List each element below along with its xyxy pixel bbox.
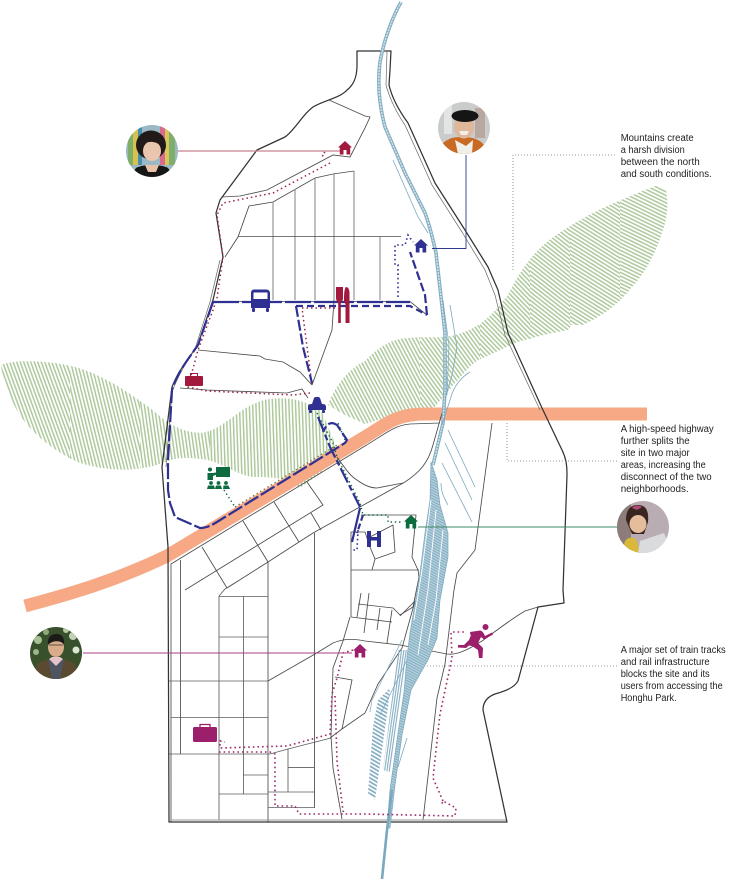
callout leader: rail <box>427 665 617 667</box>
portrait: woman <box>126 125 178 177</box>
portrait: man <box>30 627 82 679</box>
icon: runner <box>458 624 493 658</box>
route: red dotted <box>188 152 335 395</box>
street network <box>169 100 538 822</box>
route: green dotted <box>224 413 403 522</box>
text: mountains callout: Mountains create <box>621 133 694 144</box>
train tracks and rail infrastructure <box>368 2 475 879</box>
mountain band: right hatch <box>328 185 668 424</box>
text: mountains callout <box>621 133 712 180</box>
icon: fork and knife <box>336 287 350 323</box>
rail: west siding group <box>368 688 390 800</box>
icon: red briefcase <box>185 374 203 386</box>
site boundary <box>162 51 567 822</box>
icon: green house <box>404 515 418 528</box>
icon: purple briefcase <box>193 724 217 742</box>
text: highway callout: areas, increasing the <box>621 460 706 471</box>
text: highway callout: disconnect of the two <box>621 472 712 483</box>
connector: girl to home <box>418 526 617 528</box>
text: rail callout: and rail infrastructure <box>621 657 710 668</box>
rail: southern tail <box>382 790 392 879</box>
text: highway callout <box>621 424 714 495</box>
mountain band: left hatch <box>1 361 334 488</box>
rail: yard light streaks <box>414 500 443 655</box>
rail: secondary lines <box>393 160 475 767</box>
icon: classroom teacher <box>207 467 230 489</box>
text: rail callout <box>621 645 726 704</box>
icon: navy house <box>414 239 428 252</box>
text: rail callout: users from accessing the <box>621 681 723 692</box>
inner boundary line <box>166 52 540 467</box>
icon: red house <box>338 141 352 154</box>
highway <box>25 414 647 606</box>
rail: centre siding group <box>383 650 408 772</box>
callout leader: mountains <box>513 155 617 270</box>
connector: elderly man to home <box>432 155 466 248</box>
callout leader: highway <box>507 423 617 461</box>
icon: bus <box>251 290 270 312</box>
route: purple dotted <box>219 632 465 816</box>
text: highway callout: neighborhoods. <box>621 484 689 495</box>
rail: dense yard wedge <box>387 462 448 828</box>
portrait: girl <box>617 501 672 553</box>
text: rail callout: blocks the site and its <box>621 669 710 680</box>
icon: hospital H <box>367 531 381 547</box>
connector: man to home <box>83 652 352 654</box>
text: mountains callout: between the north <box>621 157 700 168</box>
text: rail callout: Honghu Park. <box>621 693 677 704</box>
text: highway callout: further splits the <box>621 436 690 447</box>
icon: car <box>308 397 326 413</box>
portrait: elderly man <box>438 102 490 154</box>
text: mountains callout: a harsh division <box>621 145 685 156</box>
connector: woman to home <box>178 150 340 152</box>
text: mountains callout: and south conditions. <box>621 169 712 180</box>
text: highway callout: site in two major <box>621 448 690 459</box>
route: navy dotted <box>352 235 413 550</box>
text: highway callout: A high-speed highway <box>621 424 714 435</box>
icon: purple house <box>353 644 367 658</box>
rail: main line bundle <box>379 2 445 465</box>
route: navy dashed <box>168 252 427 542</box>
